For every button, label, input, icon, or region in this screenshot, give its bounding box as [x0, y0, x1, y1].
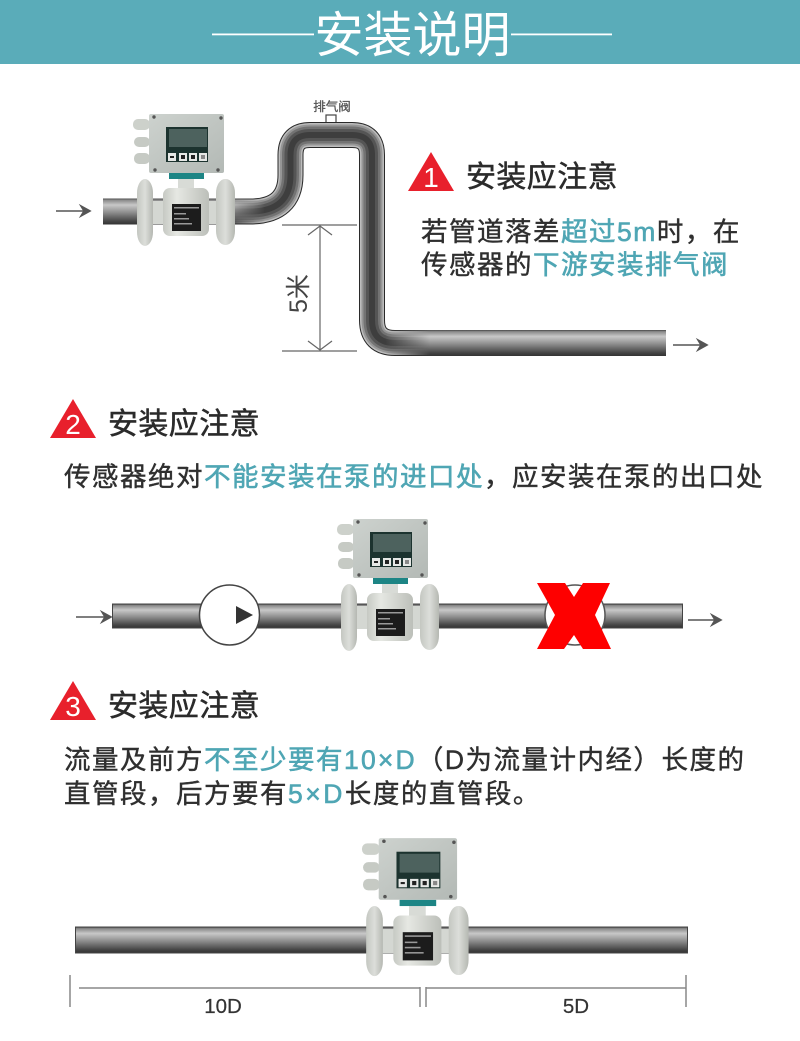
length dimension: [70, 975, 686, 1007]
label 10D: 10D: [204, 995, 242, 1018]
warning icon 3: [50, 681, 96, 722]
flow meter: [337, 519, 439, 651]
title: 安装说明: [314, 9, 511, 63]
warning icon 3: 3: [65, 691, 81, 722]
exhaust valve: [313, 99, 351, 123]
note 2 heading: [50, 399, 260, 441]
note 2 text: 传感器绝对不能安装在泵的进口处，应安装在泵的出口处: [64, 462, 764, 492]
warning icon 2: 2: [65, 409, 81, 440]
flow meter: [133, 114, 235, 246]
page header banner: [0, 0, 800, 64]
label 5D: 5D: [563, 995, 589, 1018]
note 2 heading: 安装应注意: [108, 408, 260, 441]
panel: note 1 pipe diagram: [56, 99, 707, 356]
inlet arrow: [76, 612, 111, 622]
warning icon 2: [50, 399, 96, 440]
5 metre dimension: 5米: [285, 274, 313, 313]
note 3 text line 2: 直管段，后方要有5×D长度的直管段。: [64, 779, 541, 809]
exhaust valve: 排气阀: [313, 99, 351, 114]
note 3 text: 流量及前方不至少要有10×D（D为流量计内经）长度的: [64, 745, 746, 775]
panel: straight run diagram: [70, 838, 688, 1018]
note 3 heading: 安装应注意: [108, 690, 260, 723]
outlet arrow: [673, 340, 707, 350]
note 1 heading: 安装应注意: [466, 161, 618, 194]
note 1 heading: [408, 152, 618, 194]
inlet arrow: [56, 206, 90, 216]
panel: pump diagram: [76, 519, 721, 651]
pipe: [112, 604, 682, 628]
warning icon 1: [408, 152, 454, 193]
elevated pipe: [103, 135, 666, 356]
warning icon 1: 1: [423, 162, 439, 193]
note 3 heading: [50, 681, 260, 723]
outlet arrow: [688, 615, 721, 625]
rejected pump position: [537, 583, 611, 649]
flow meter: [362, 838, 469, 976]
note 1 text line 2: 传感器的下游安装排气阀: [421, 250, 729, 280]
pipe: [76, 927, 688, 953]
pump symbol: [200, 585, 260, 645]
note 1 text: 若管道落差超过5m时，在: [421, 217, 741, 247]
5 metre dimension: [282, 225, 357, 351]
